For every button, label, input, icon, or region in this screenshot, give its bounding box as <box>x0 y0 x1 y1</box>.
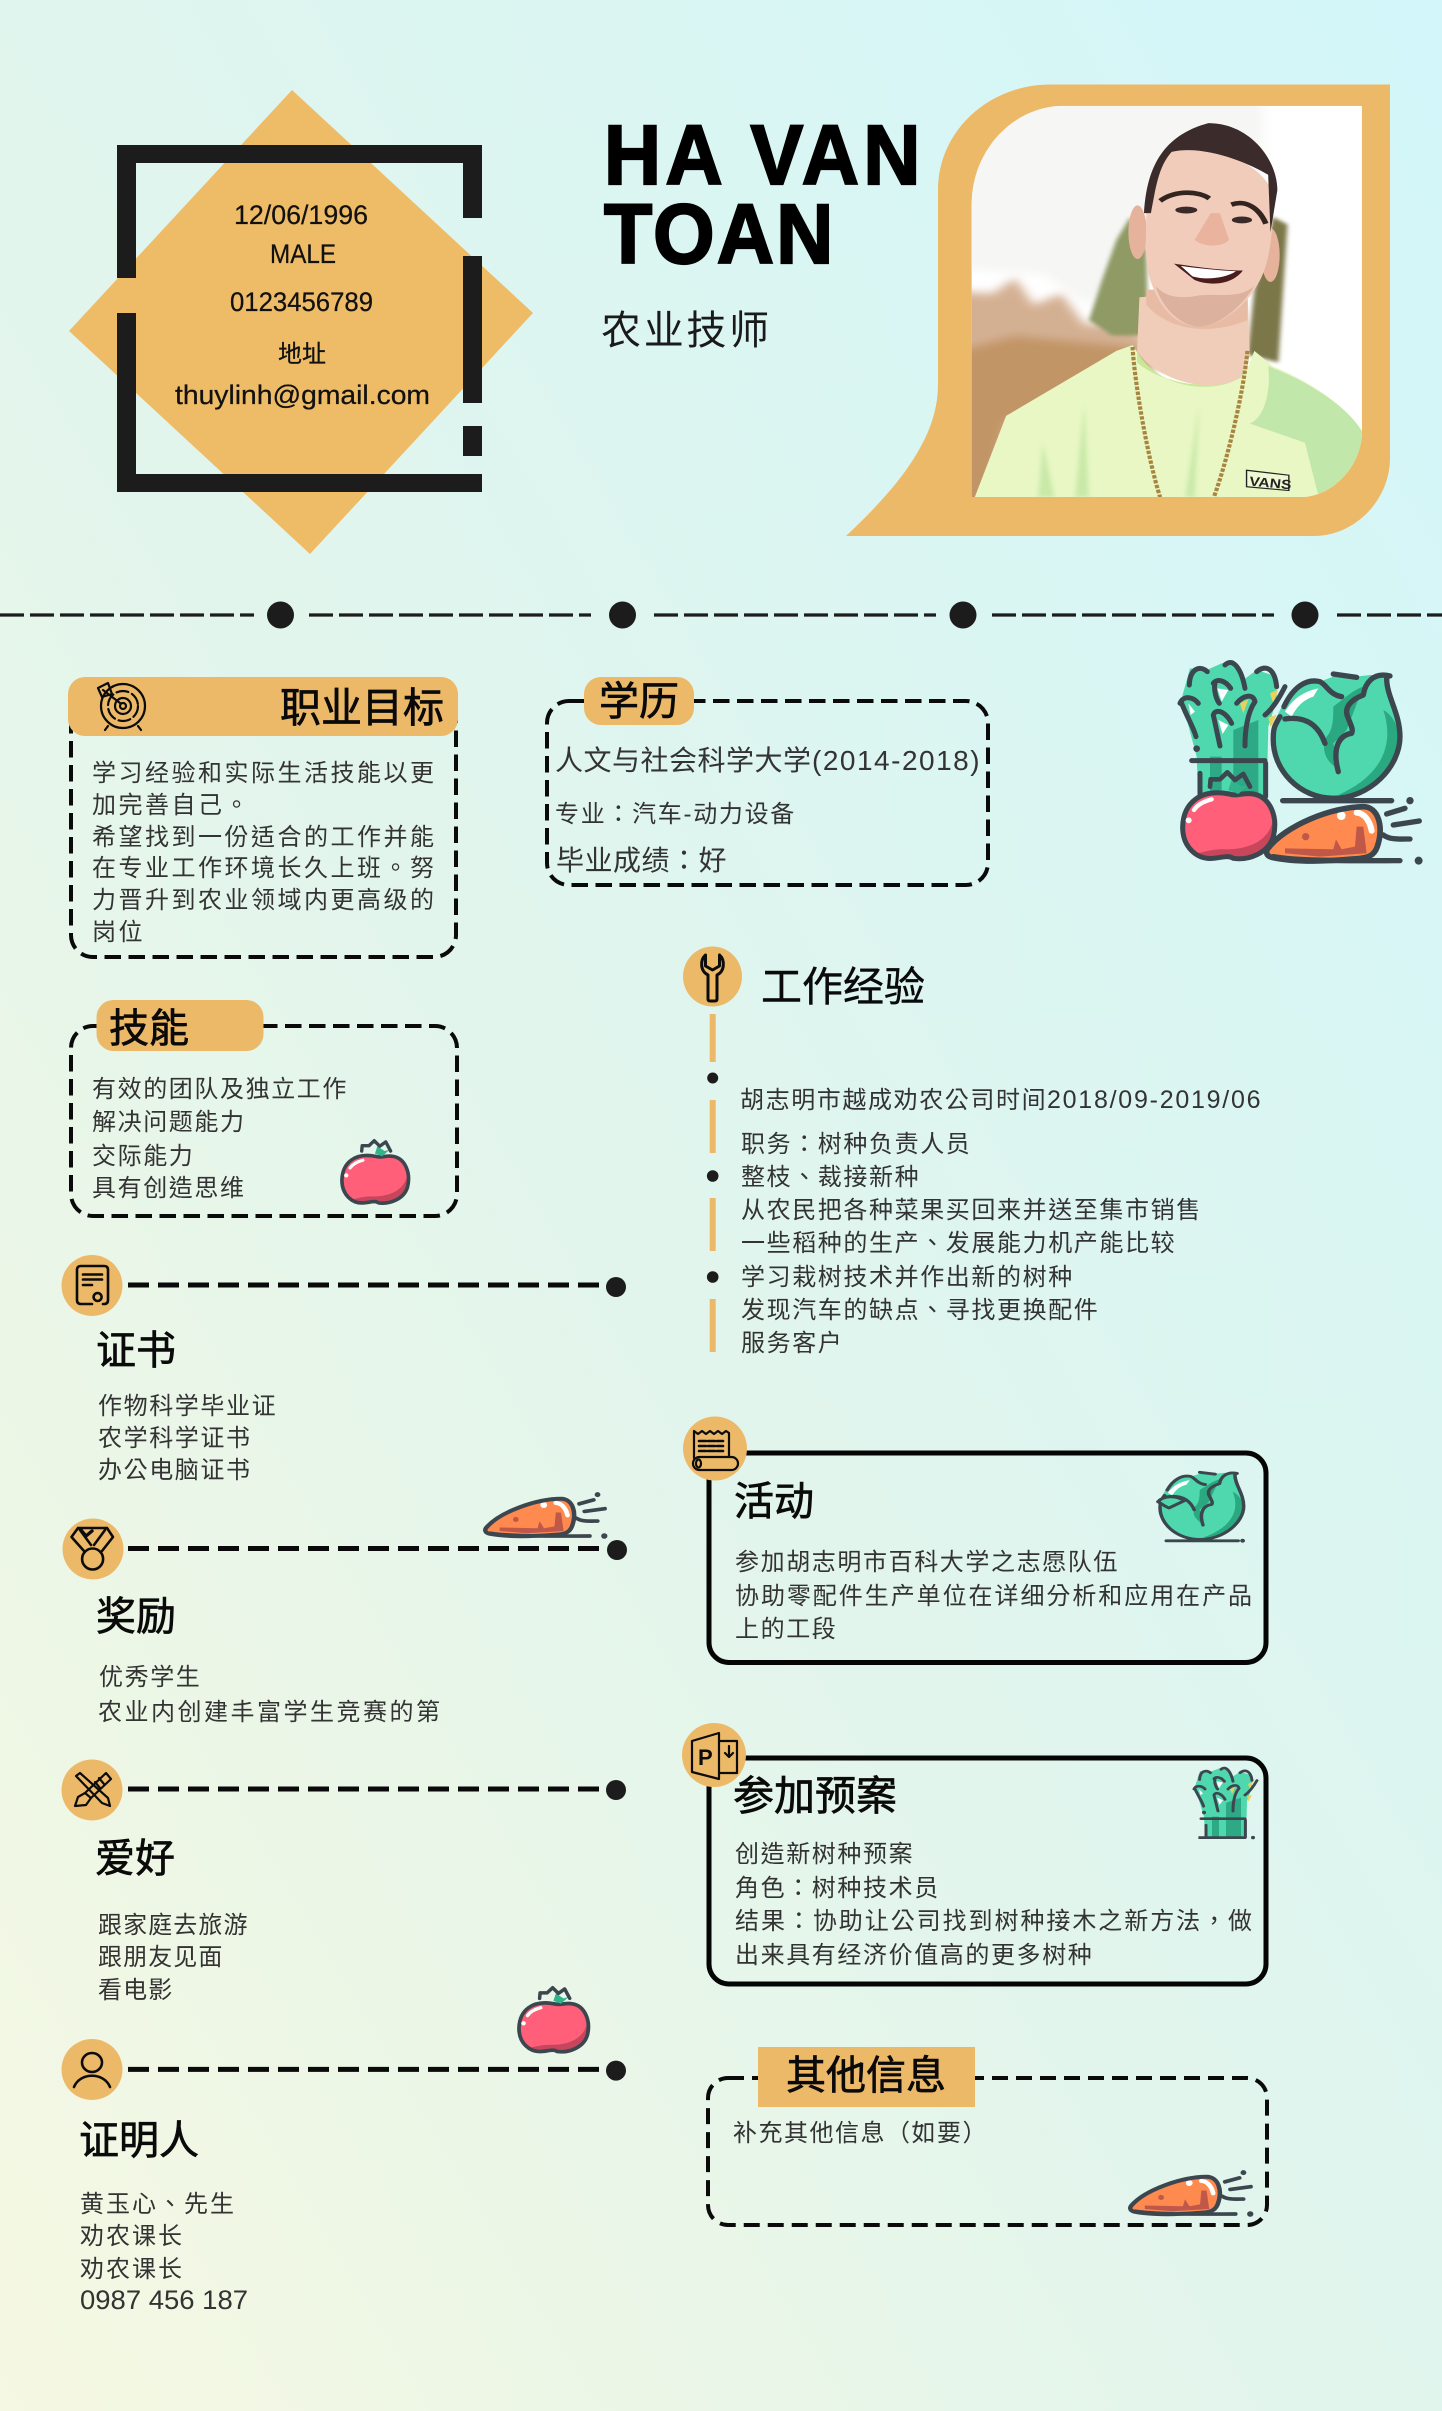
other information heading: 其他信息 <box>786 2054 946 2098</box>
title: name: TOAN <box>604 188 836 282</box>
objective text <box>92 760 436 946</box>
education text: (2014-2018) <box>812 745 981 776</box>
education text: 人文与社会科学大学 <box>555 745 812 776</box>
icon: pencil and brush <box>62 1760 122 1820</box>
projects text: 角色：树种技术员 <box>735 1875 940 1902</box>
work heading: 工作经验 <box>761 964 925 1010</box>
objective text: 在专业工作环境长久上班。努 <box>92 855 436 882</box>
skills text: 解决问题能力 <box>92 1109 246 1136</box>
icon: tomato <box>342 1141 409 1203</box>
education heading: 学历 <box>599 680 679 724</box>
panel: hobbies <box>62 1760 626 2004</box>
job title: 农业技师 <box>601 309 772 353</box>
icon: certificate <box>62 1255 122 1316</box>
work text: 学习栽树技术并作出新的树种 <box>741 1264 1074 1291</box>
contact details: 0123456789 <box>230 287 373 317</box>
icon: carrot <box>485 1492 607 1539</box>
objective text: 岗位 <box>92 919 145 946</box>
icon: medal <box>62 1518 124 1580</box>
work text: 服务客户 <box>741 1330 843 1357</box>
contact details: thuylinh@gmail.com <box>175 380 430 410</box>
orange diamond <box>69 90 533 554</box>
panel: projects <box>682 1723 1266 1984</box>
icon: presentation file <box>682 1723 746 1787</box>
contact details: MALE <box>270 239 336 269</box>
portrait frame <box>846 84 1390 536</box>
projects text: 结果：协助让公司找到树种接木之新方法，做 <box>735 1908 1254 1935</box>
education text <box>555 745 981 876</box>
panel: education <box>547 677 988 885</box>
icon: wrench <box>683 946 742 1006</box>
work text: 一些稻种的生产、发展能力机产能比较 <box>741 1230 1176 1257</box>
certificates text: 作物科学毕业证 <box>98 1393 277 1420</box>
activities text: 协助零配件生产单位在详细分析和应用在产品 <box>735 1583 1254 1610</box>
objective text: 学习经验和实际生活技能以更 <box>92 760 436 787</box>
skills heading: 技能 <box>109 1007 189 1051</box>
work text: 2018/09-2019/06 <box>1047 1086 1262 1114</box>
skills text: 具有创造思维 <box>92 1175 246 1202</box>
panel: career objective <box>68 677 458 957</box>
awards text: 优秀学生 <box>99 1664 201 1691</box>
references heading: 证明人 <box>79 2119 199 2163</box>
education text: 专业：汽车-动力设备 <box>555 801 796 828</box>
icon: person <box>62 2039 122 2100</box>
work text <box>740 1086 1262 1357</box>
references text: 劝农课长 <box>80 2256 184 2283</box>
icon: cabbage <box>1158 1472 1245 1543</box>
title: name <box>604 109 925 282</box>
skills text: 有效的团队及独立工作 <box>92 1076 348 1103</box>
projects text <box>735 1841 1254 1969</box>
work text: 整枝、裁接新种 <box>741 1164 920 1191</box>
panel: certificates <box>62 1255 626 1484</box>
projects text: 出来具有经济价值高的更多树种 <box>735 1942 1093 1969</box>
panel: activities <box>683 1416 1266 1662</box>
icon: scroll <box>683 1416 747 1480</box>
hobbies rule <box>128 1780 626 1800</box>
awards text: 农业内创建丰富学生竞赛的第 <box>98 1699 442 1726</box>
objective text: 力晋升到农业领域内更高级的 <box>92 887 436 914</box>
work text: 胡志明市越成劝农公司时间 <box>740 1087 1047 1114</box>
hobbies text: 跟家庭去旅游 <box>98 1912 249 1939</box>
panel: skills <box>71 1000 457 1216</box>
projects heading: 参加预案 <box>733 1773 897 1819</box>
icon: presentation file: P <box>698 1745 713 1770</box>
contact details <box>175 200 430 410</box>
skills heading pill <box>96 1000 264 1051</box>
certificates text: 农学科学证书 <box>98 1425 252 1452</box>
hobbies text: 看电影 <box>98 1977 173 2004</box>
hobbies text: 跟朋友见面 <box>98 1944 224 1971</box>
work timeline bar <box>707 1014 718 1352</box>
other information text: 补充其他信息（如要） <box>733 2120 988 2147</box>
references text: 劝农课长 <box>80 2223 184 2250</box>
references text: 黄玉心、先生 <box>80 2191 236 2218</box>
activities text: 上的工段 <box>735 1616 837 1643</box>
panel: awards <box>62 1518 627 1726</box>
work text: 职务：树种负责人员 <box>741 1131 971 1158</box>
objective text: 加完善自己。 <box>92 792 251 819</box>
diamond contact block <box>69 90 533 554</box>
projects text: 创造新树种预案 <box>735 1841 914 1868</box>
panel: work experience <box>683 946 1262 1357</box>
skills text <box>92 1076 348 1202</box>
activities text: 参加胡志明市百科大学之志愿队伍 <box>735 1549 1119 1576</box>
portrait photo: VANS <box>1248 475 1293 493</box>
title: name: HA VAN <box>604 109 925 203</box>
education heading pill <box>584 677 694 725</box>
timeline divider <box>0 602 1442 628</box>
objective text: 希望找到一份适合的工作并能 <box>92 824 436 851</box>
awards heading: 奖励 <box>96 1595 176 1639</box>
certificates text: 办公电脑证书 <box>98 1457 252 1484</box>
certificates text <box>98 1393 277 1484</box>
work text: 从农民把各种菜果买回来并送至集市销售 <box>741 1197 1202 1224</box>
hobbies heading: 爱好 <box>95 1837 175 1881</box>
objective heading: 职业目标 <box>280 685 444 731</box>
references text: 0987 456 187 <box>80 2285 248 2315</box>
icon: vegetables illustration <box>1180 660 1423 865</box>
panel: other information <box>708 2047 1267 2225</box>
references text <box>80 2191 248 2315</box>
work text: 发现汽车的缺点、寻找更换配件 <box>741 1297 1099 1324</box>
certificates rule <box>128 1277 626 1297</box>
icon: target <box>98 683 145 730</box>
awards rule <box>128 1540 627 1560</box>
contact details: 12/06/1996 <box>234 200 368 230</box>
icon: asparagus <box>1194 1767 1257 1839</box>
references rule <box>128 2061 626 2081</box>
activities heading: 活动 <box>734 1480 814 1524</box>
other information header <box>758 2047 975 2107</box>
hobbies text <box>98 1912 249 2004</box>
activities text <box>735 1549 1254 1643</box>
portrait photo <box>972 106 1362 497</box>
black broken frame <box>117 145 482 492</box>
skills text: 交际能力 <box>92 1143 194 1170</box>
certificates heading: 证书 <box>96 1329 176 1373</box>
contact details: 地址 <box>278 341 326 368</box>
awards text <box>98 1664 442 1726</box>
panel: references <box>62 2039 626 2315</box>
icon: carrot <box>1130 2170 1253 2217</box>
objective header bar <box>68 677 458 736</box>
education text: 毕业成绩：好 <box>556 845 727 876</box>
icon: tomato <box>519 1988 588 2052</box>
